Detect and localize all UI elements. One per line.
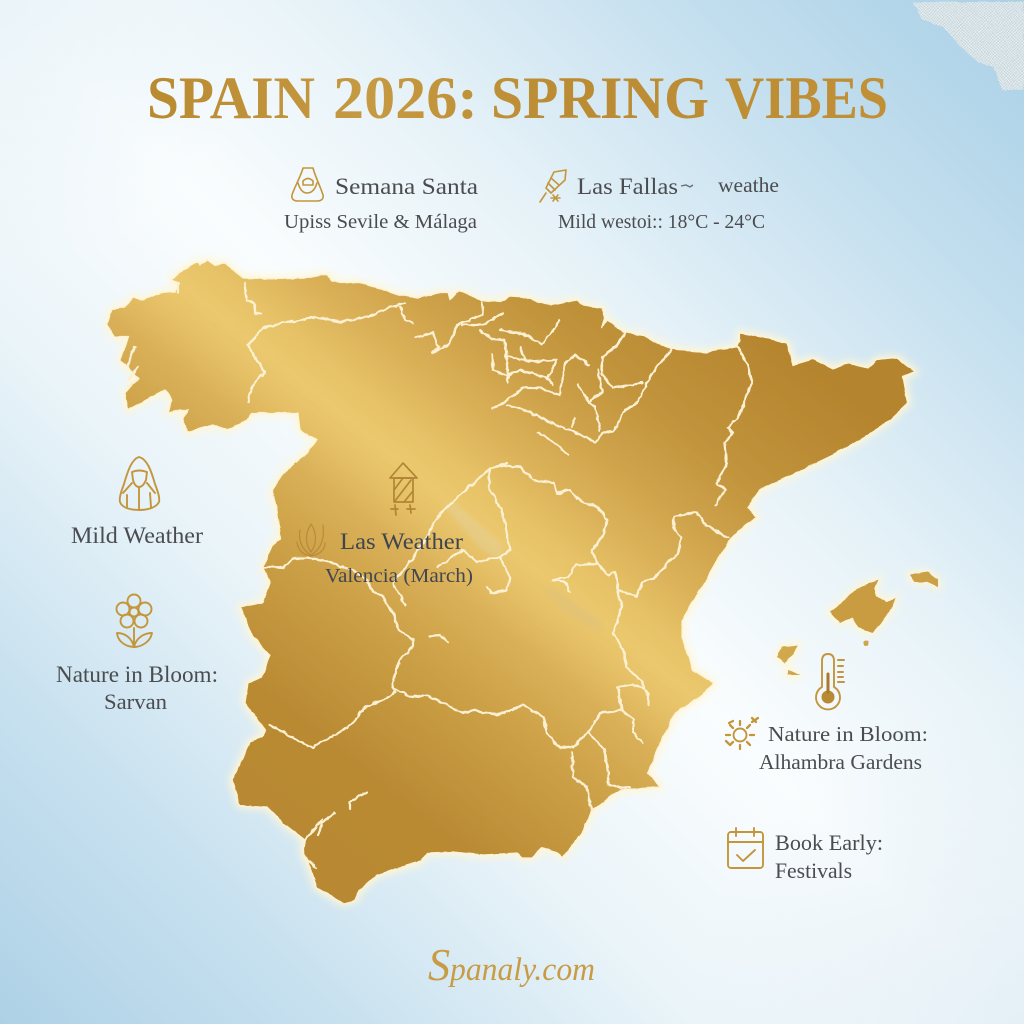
title: 2026:	[333, 65, 478, 131]
map of Spain	[107, 260, 938, 903]
center label: Las Weather: Las Weather	[340, 529, 463, 554]
right callout: Book Early	[728, 828, 883, 883]
icon: lotus on map	[297, 524, 325, 556]
right callout: Book Early: Festivals	[775, 858, 852, 883]
smudge mark	[681, 185, 693, 187]
map glow	[107, 260, 938, 903]
mainland and islands	[107, 260, 938, 903]
title: SPAIN	[147, 65, 315, 131]
right callout: Book Early: Book Early:	[775, 830, 883, 855]
event: Semana Santa: Semana Santa	[335, 174, 478, 199]
left callout: Mild Weather: Mild Weather	[71, 523, 203, 548]
title: VIBES	[725, 65, 888, 131]
center label: Las Weather	[297, 463, 473, 587]
left callout: Nature in Bloom	[56, 594, 218, 714]
icon: firework rocket on map	[390, 463, 417, 515]
event: Las Fallas: Mild westoi:: 18°C - 24°C	[558, 211, 765, 233]
event: Semana Santa	[284, 168, 478, 233]
footer logo: Spanaly.com	[428, 939, 595, 990]
left callout: Nature in Bloom: Nature in Bloom:	[56, 662, 218, 687]
title	[147, 65, 888, 131]
right callout: Nature in Bloom: Nature in Bloom:	[768, 722, 928, 746]
icon: sun	[726, 718, 758, 749]
event: Semana Santa: Upiss Sevile & Málaga	[284, 211, 477, 233]
icon: flower	[116, 594, 152, 647]
event: Las Fallas: weathe	[718, 173, 779, 197]
icon: hooded figure small	[292, 168, 323, 201]
icon: calendar	[728, 828, 763, 868]
icon: thermometer	[816, 654, 844, 709]
icon: firework rocket small	[540, 170, 566, 202]
hazy patches	[442, 503, 503, 563]
left callout: Nature in Bloom: Sarvan	[104, 689, 167, 714]
icon: hooded figure	[120, 457, 159, 510]
left callout: Mild Weather	[71, 457, 203, 548]
region borders	[128, 283, 752, 868]
right callout: Nature in Bloom	[726, 718, 928, 774]
event: Las Fallas	[540, 170, 779, 233]
center label: Las Weather: Valencia (March)	[325, 565, 473, 587]
right callout: Nature in Bloom: Alhambra Gardens	[759, 750, 922, 774]
event: Las Fallas: Las Fallas	[577, 174, 678, 199]
title: SPRING	[491, 65, 709, 131]
